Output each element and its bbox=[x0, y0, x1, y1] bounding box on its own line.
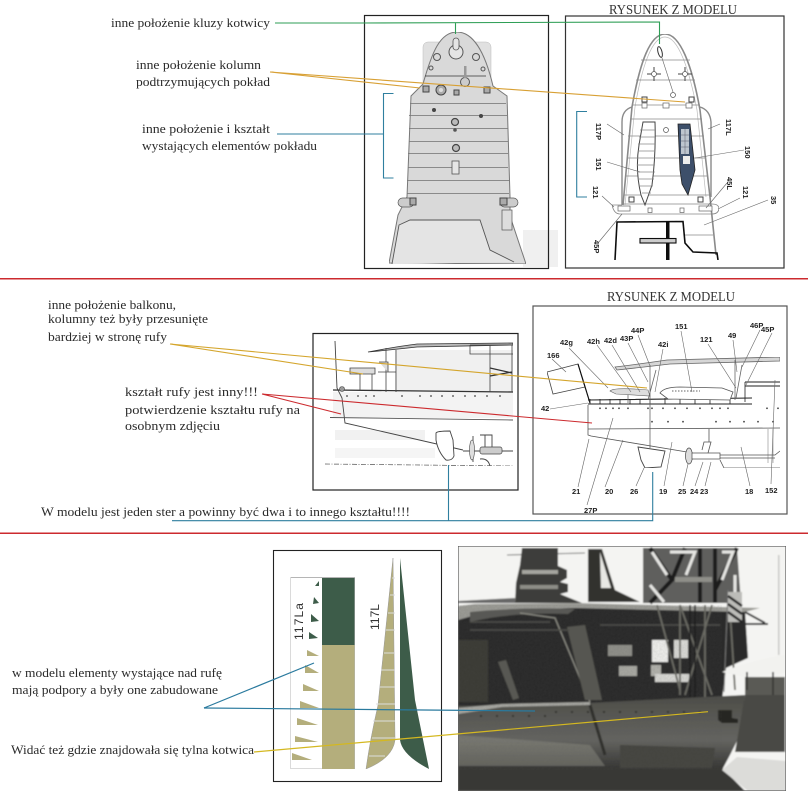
part numbers: side drawing: 42g bbox=[560, 338, 573, 347]
divider: section 2 bbox=[0, 532, 808, 534]
part numbers: side drawing: 45P bbox=[761, 325, 774, 334]
decal: green tapered piece bbox=[400, 558, 429, 769]
callout: deck support columns bbox=[136, 58, 685, 102]
part numbers: deck drawing: 35 bbox=[769, 196, 778, 204]
decal: small wedges bbox=[292, 581, 319, 760]
part numbers: deck drawing: 45L bbox=[725, 177, 734, 190]
decal: tan tapered piece bbox=[366, 558, 395, 769]
water bbox=[458, 757, 786, 791]
part numbers: side drawing: 25 bbox=[678, 487, 686, 496]
panel: section 2 model side drawing bbox=[533, 306, 787, 515]
part numbers: deck drawing: 45P bbox=[592, 240, 601, 253]
heading: RYSUNEK Z MODELU (section 1): RYSUNEK Z MODELU bbox=[609, 3, 737, 18]
flag bbox=[724, 590, 768, 692]
part numbers: deck drawing: 121 bbox=[591, 186, 600, 199]
part numbers: side drawing: 46P bbox=[750, 321, 763, 330]
part numbers: side drawing: 44P bbox=[631, 326, 644, 335]
hull bbox=[458, 695, 745, 770]
part numbers: side drawing: 49 bbox=[728, 331, 736, 340]
part numbers: side drawing: 42i bbox=[658, 340, 668, 349]
label: 117L: 117L bbox=[368, 604, 382, 630]
part numbers: side drawing: 151 bbox=[675, 322, 688, 331]
bridge tower bbox=[455, 548, 585, 603]
panel: section 3 decal sheet 117L bbox=[274, 550, 442, 782]
part numbers: deck drawing: 151 bbox=[594, 158, 603, 171]
part numbers: side drawing: 18 bbox=[745, 487, 753, 496]
panel: section 3 photograph of stern bbox=[455, 546, 786, 791]
callout: stern supports: w modelu elementy wystające nad rufę bbox=[12, 666, 222, 680]
divider: section 1 bbox=[0, 278, 808, 280]
callout: stern supports bbox=[12, 663, 535, 711]
panel: section 1 model deck drawing bbox=[566, 16, 784, 268]
callout: deck support columns: podtrzymujących pokład bbox=[136, 75, 271, 89]
part numbers: side drawing: 42d bbox=[604, 336, 617, 345]
callout: stern supports: mają podpory a były one zabudowane bbox=[12, 683, 218, 697]
part numbers: side drawing: 24 bbox=[690, 487, 699, 496]
panel: section 2 reference side profile bbox=[313, 334, 518, 490]
part numbers: side drawing: 166 bbox=[547, 351, 560, 360]
callout: deck support columns: inne położenie kolumn bbox=[136, 58, 262, 72]
part numbers: deck drawing: 121 bbox=[741, 186, 750, 199]
callout: protruding deck elements bbox=[142, 94, 587, 197]
part numbers: side drawing: 27P bbox=[584, 506, 597, 515]
part numbers: side drawing bbox=[541, 321, 778, 515]
callout: stern anchor bbox=[11, 712, 708, 757]
scaffold and windows bbox=[608, 605, 735, 700]
callout: balcony position: bardziej w stronę rufy bbox=[48, 330, 168, 344]
part numbers: side drawing: 19 bbox=[659, 487, 667, 496]
heading: RYSUNEK Z MODELU (section 2): RYSUNEK Z MODELU bbox=[607, 290, 735, 305]
callout: rudder: W modelu jest jeden ster a powinny być dwa i to innego kształtu!!!! bbox=[41, 505, 410, 519]
mast bbox=[588, 549, 640, 602]
part numbers: deck drawing bbox=[591, 119, 778, 253]
part numbers: side drawing: 42 bbox=[541, 404, 549, 413]
part numbers: side drawing: 42h bbox=[587, 337, 600, 346]
part numbers: side drawing: 43P bbox=[620, 334, 633, 343]
callout: anchor hatch: inne położenie kluzy kotwicy bbox=[111, 16, 271, 30]
pier and awning bbox=[722, 555, 785, 752]
part numbers: deck drawing: 117P bbox=[594, 123, 603, 140]
decal: green strip bbox=[322, 578, 354, 645]
crane lattice bbox=[643, 548, 741, 603]
part numbers: side drawing: 26 bbox=[630, 487, 638, 496]
decal: tan strip bbox=[322, 645, 354, 769]
callout: protruding deck elements: wystających elementów pokładu bbox=[142, 139, 318, 153]
callout: stern shape: potwierdzenie kształtu rufy na bbox=[125, 403, 300, 417]
callout: protruding deck elements: inne położenie i kształt bbox=[142, 122, 271, 136]
callout: stern shape bbox=[125, 385, 592, 433]
part numbers: side drawing: 21 bbox=[572, 487, 580, 496]
part numbers: deck drawing: 117L bbox=[724, 119, 733, 136]
hangar dark bbox=[458, 603, 760, 712]
part numbers: side drawing: 121 bbox=[700, 335, 713, 344]
callout: rudder bbox=[41, 465, 653, 521]
part numbers: side drawing: 20 bbox=[605, 487, 613, 496]
callout: balcony position: inne położenie balkonu, bbox=[48, 298, 176, 312]
part numbers: side drawing: 23 bbox=[700, 487, 708, 496]
callout: stern shape: osobnym zdjęciu bbox=[125, 419, 221, 433]
callout: balcony position: kolumny też były przesunięte bbox=[48, 312, 208, 326]
callout: stern anchor: Widać też gdzie znajdowała się tylna kotwica bbox=[11, 743, 254, 757]
callout: balcony position bbox=[48, 298, 647, 388]
panel: section 1 reference deck plan bbox=[364, 16, 558, 268]
label: 117La: 117La bbox=[292, 603, 306, 640]
callout: stern shape: kształt rufy jest inny!!! bbox=[125, 385, 258, 399]
callout: anchor hatch bbox=[111, 16, 660, 44]
part numbers: side drawing: 152 bbox=[765, 486, 778, 495]
part numbers: deck drawing: 150 bbox=[743, 146, 752, 159]
